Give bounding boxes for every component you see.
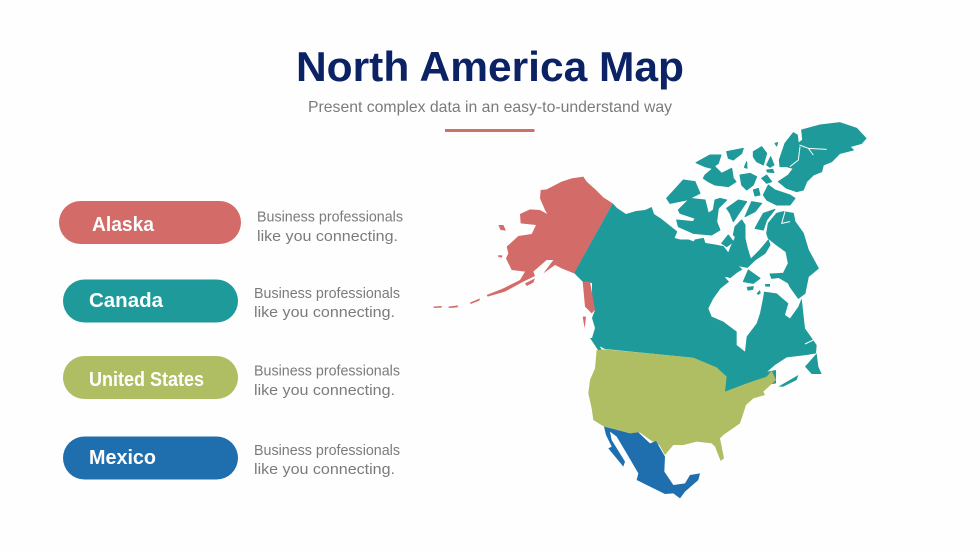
map of North America <box>433 123 866 498</box>
legend item: Canada: like you connecting. <box>254 304 395 321</box>
legend item: Canada: Business professionals <box>254 285 400 302</box>
map region: Canada <box>574 123 866 392</box>
legend item: United States: Business professionals <box>254 362 400 380</box>
white channels <box>790 145 827 167</box>
legend item: Alaska: Alaska <box>92 214 155 236</box>
legend item: United States: United States <box>89 369 204 391</box>
legend item: Mexico: Mexico <box>89 447 156 469</box>
subtitle: Present complex data in an easy-to-understand way <box>308 99 672 116</box>
map region: Alaska <box>433 177 613 328</box>
legend item: Alaska: Business professionals <box>257 208 403 226</box>
map region: United States <box>588 349 776 461</box>
map region: Mexico <box>604 427 700 498</box>
Arctic islands (north) <box>696 123 866 205</box>
legend item: Canada <box>63 280 400 322</box>
title: North America Map <box>296 43 684 90</box>
legend item: United States: like you connecting. <box>254 382 395 399</box>
legend item: Mexico: like you connecting. <box>254 461 395 478</box>
legend item: Alaska <box>59 201 403 245</box>
legend item: United States <box>63 356 400 399</box>
legend item: Mexico: Business professionals <box>254 442 400 459</box>
title underline <box>445 129 534 132</box>
legend item: Mexico <box>63 436 400 480</box>
legend item: Alaska: like you connecting. <box>257 228 398 245</box>
legend item: Canada: Canada <box>89 290 164 312</box>
